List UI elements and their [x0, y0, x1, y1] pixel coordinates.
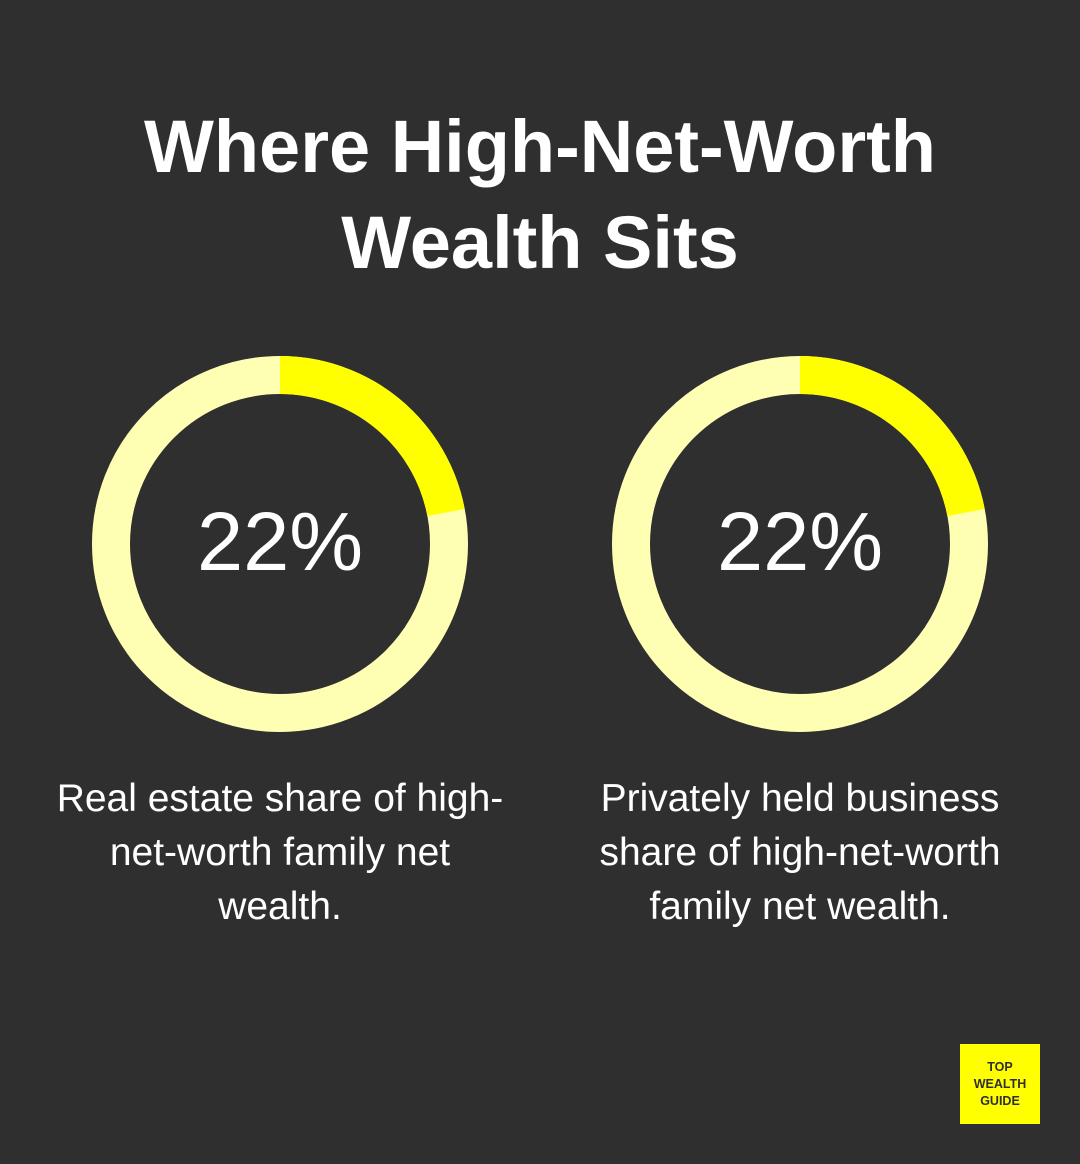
- caption: private business: [599, 777, 1001, 928]
- logo: WEALTH: [974, 1076, 1026, 1090]
- donut: real estate: 22%: [197, 495, 363, 588]
- caption: real estate: net-worth family net: [110, 831, 450, 874]
- title: Wealth Sits: [341, 201, 739, 284]
- logo: TOP: [987, 1060, 1013, 1074]
- donut: private business: 22%: [717, 495, 883, 588]
- logo: [960, 1044, 1040, 1124]
- caption: private business: Privately held business: [601, 777, 999, 820]
- logo: GUIDE: [980, 1094, 1020, 1108]
- donut: private business: [631, 375, 969, 713]
- caption: real estate: [57, 777, 503, 928]
- donut: real estate: [111, 375, 449, 713]
- caption: real estate: Real estate share of high-: [57, 777, 503, 820]
- caption: private business: share of high-net-worth: [599, 831, 1001, 874]
- title: [144, 105, 936, 284]
- donut charts: [92, 356, 988, 732]
- caption: real estate: wealth.: [218, 885, 342, 928]
- caption: private business: family net wealth.: [649, 885, 951, 928]
- title: Where High-Net-Worth: [144, 105, 936, 188]
